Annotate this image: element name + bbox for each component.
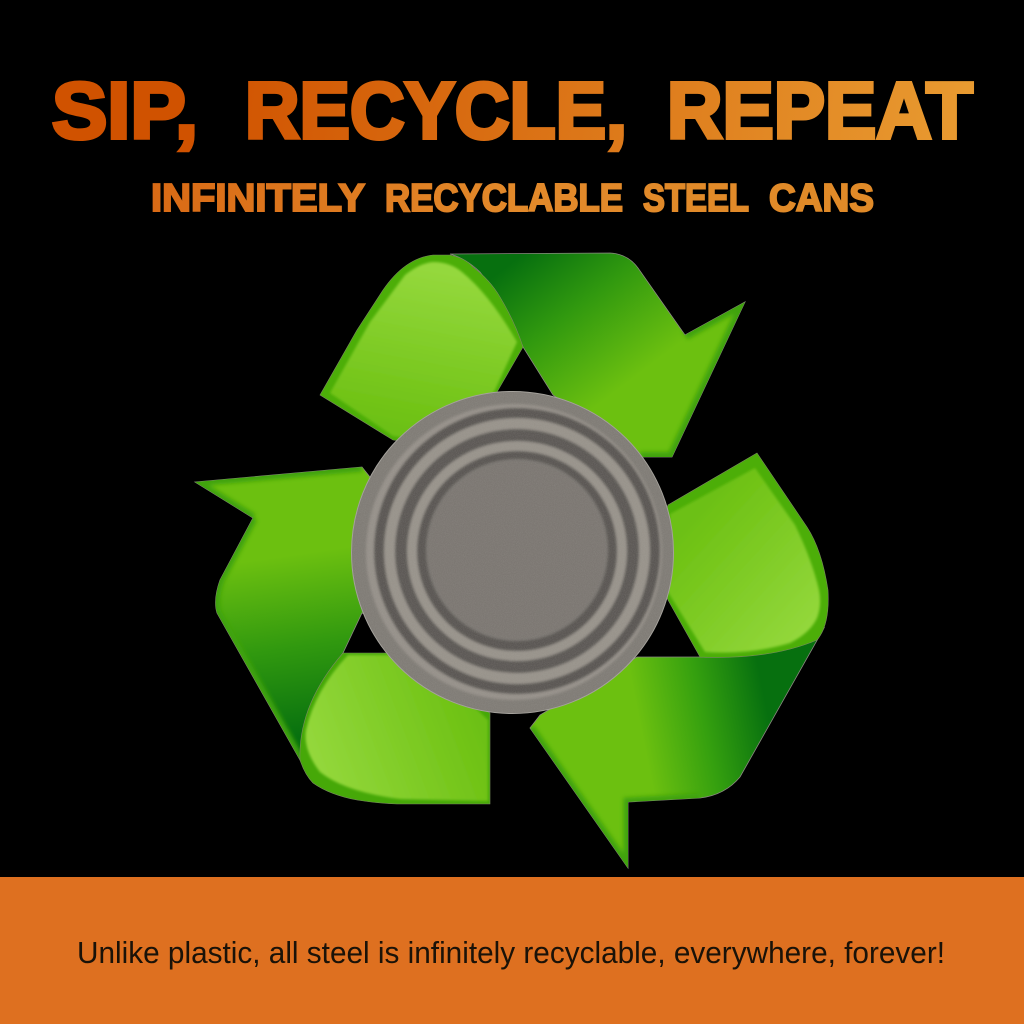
arrow: left — [195, 467, 490, 804]
subtitle: CANS — [769, 177, 874, 220]
footer band — [0, 877, 1024, 1024]
title — [52, 66, 973, 155]
title: RECYCLE, — [245, 66, 627, 155]
footer text: Unlike plastic, all steel is infinitely recyclable, everywhere, forever! — [77, 935, 945, 970]
subtitle — [151, 177, 874, 220]
arrow: right — [530, 453, 828, 868]
steel can lid — [352, 392, 674, 714]
subtitle: INFINITELY — [151, 177, 365, 220]
title: SIP, — [52, 66, 198, 155]
arrow: top — [320, 253, 745, 457]
subtitle: RECYCLABLE — [385, 177, 623, 220]
subtitle: STEEL — [643, 177, 749, 220]
title: REPEAT — [667, 66, 973, 155]
recycling symbol — [195, 253, 828, 868]
